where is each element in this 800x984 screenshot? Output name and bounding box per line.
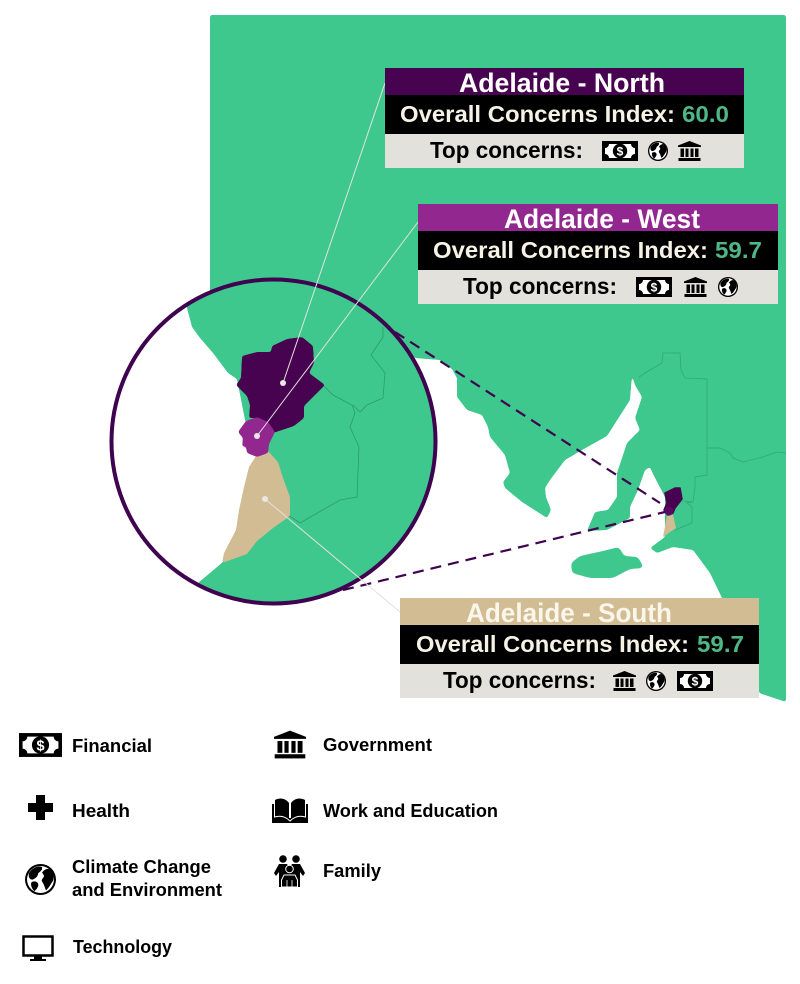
- legend item: Family: Family: [323, 860, 382, 881]
- leader lines and location dots: [254, 83, 418, 612]
- panel: Adelaide South: Adelaide - South: [466, 598, 672, 628]
- legend item: Financial: [19, 733, 152, 757]
- legend item: Financial: Financial: [72, 735, 152, 756]
- legend item: Health: Health: [72, 800, 130, 821]
- panel: Adelaide North: Top concerns:: [430, 137, 583, 163]
- panel: Adelaide South: Overall Concerns Index:: [416, 631, 689, 657]
- dashed zoom connector lines: [343, 332, 665, 590]
- zoom circle: [110, 278, 438, 606]
- inset: Adelaide West region: [238, 417, 275, 457]
- panel: Adelaide South: [400, 598, 759, 698]
- panel: Adelaide North: 60.0: [682, 101, 729, 127]
- legend item: Work and Education: [272, 799, 498, 823]
- legend item: Family: [274, 855, 382, 887]
- inset: green land: [187, 282, 434, 602]
- legend: [19, 731, 498, 961]
- panel: Adelaide South: $: [692, 674, 699, 688]
- legend item: Government: Government: [323, 734, 432, 755]
- legend item: Health: [28, 795, 130, 821]
- map: small Adelaide regions: [663, 488, 682, 537]
- panel: Adelaide West: Top concerns:: [463, 273, 617, 299]
- panel: Adelaide North: [385, 68, 744, 168]
- panel: Adelaide North: $: [617, 144, 624, 158]
- panel: Adelaide West: [418, 204, 778, 304]
- panel: Adelaide North: Overall Concerns Index:: [400, 101, 675, 127]
- panel: Adelaide West: Adelaide - West: [504, 204, 700, 234]
- map: Kangaroo Island: [571, 547, 644, 578]
- panel: Adelaide North: Adelaide - North: [459, 68, 665, 98]
- legend item: Climate Change and Environment: Climate Change: [72, 856, 211, 877]
- panel: Adelaide West: $: [651, 280, 658, 294]
- inset: Adelaide South region: [222, 451, 290, 563]
- map: internal region borders: [639, 353, 786, 530]
- panel: Adelaide West: 59.7: [715, 237, 762, 263]
- legend item: Government: [274, 731, 432, 758]
- legend item: Work and Education: Work and Education: [323, 800, 498, 821]
- legend item: Technology: [24, 936, 173, 961]
- legend item: Technology: Technology: [73, 936, 173, 957]
- panel: Adelaide South: Top concerns:: [443, 667, 596, 693]
- panel: Adelaide South: 59.7: [697, 631, 744, 657]
- legend item: Climate Change and Environment: [25, 856, 222, 900]
- inset: Adelaide North region: [236, 337, 325, 433]
- legend item: Financial: $: [36, 738, 45, 754]
- panel: Adelaide West: Overall Concerns Index:: [433, 237, 708, 263]
- map: South Australia landmass: [210, 15, 786, 702]
- legend item: Climate Change and Environment: and Environment: [72, 879, 222, 900]
- inset: region borders: [288, 327, 385, 523]
